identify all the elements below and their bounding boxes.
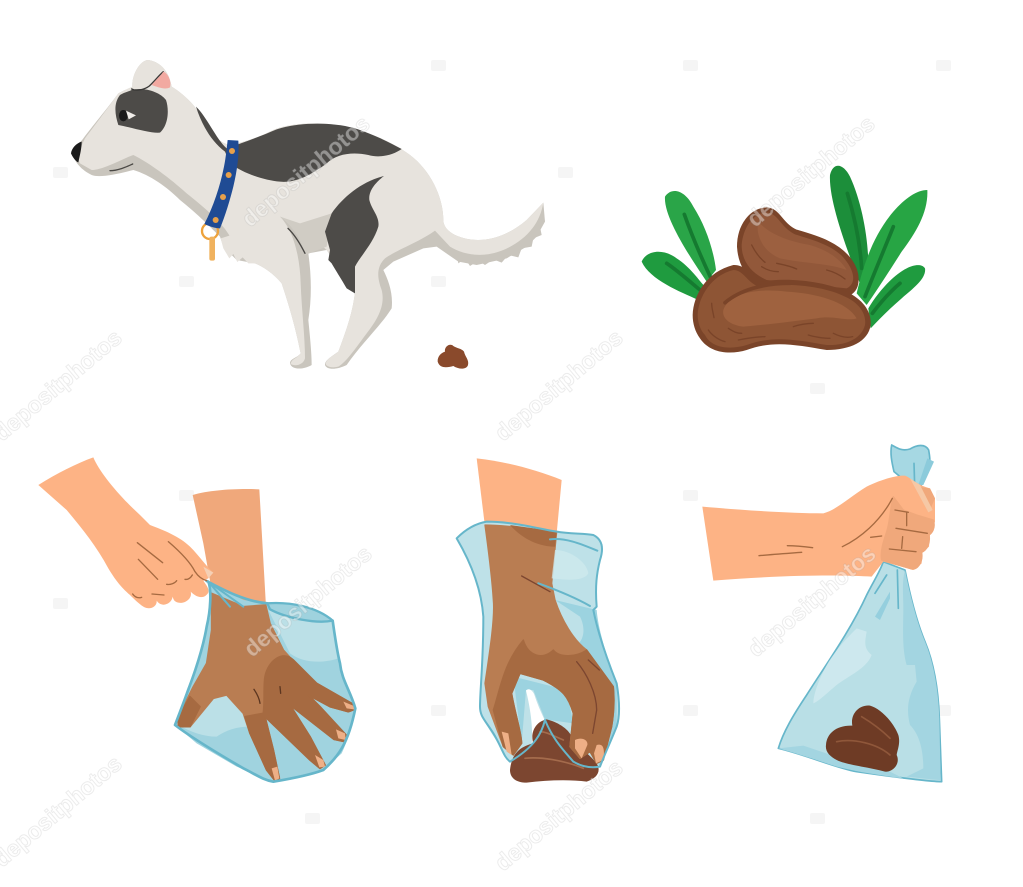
illustration: poop in grass <box>642 166 927 353</box>
back patch <box>196 107 402 182</box>
bag highlight <box>813 628 872 703</box>
watermark: repeated stock-photo text <box>0 110 881 876</box>
outer hand <box>38 457 213 608</box>
nose <box>71 142 82 162</box>
bag knot top <box>891 445 934 488</box>
inner arm <box>193 489 266 610</box>
watermark: repeated stock-photo text: depositphotos <box>490 324 628 446</box>
watermark: repeated stock-photo text: depositphotos <box>743 540 881 662</box>
eye patch <box>115 89 168 133</box>
small dropping <box>438 345 468 369</box>
dog body shadow under belly <box>280 213 332 255</box>
bag top rim <box>267 603 333 622</box>
poop on ground <box>510 719 599 783</box>
poop in bag <box>826 706 899 772</box>
illustration: squatting dog <box>71 60 545 369</box>
watermark: repeated stock-photo text: depositphotos <box>742 110 880 232</box>
hole between fingers <box>526 689 544 745</box>
illustration: two hands opening bag <box>38 457 355 782</box>
flank patch <box>325 176 384 293</box>
illustration: hand holding tied bag <box>702 445 942 782</box>
gloved hand <box>485 525 614 763</box>
bag lighter sheen <box>268 610 338 662</box>
bag outline <box>175 581 355 782</box>
bag body <box>457 522 619 767</box>
bag gathered pleats <box>208 582 243 607</box>
inner ear <box>152 72 170 88</box>
bag sheen <box>552 550 588 580</box>
upper poop coil <box>737 208 858 295</box>
watermark: faint camera icons <box>53 60 951 824</box>
bag body <box>175 582 355 782</box>
bag darker tint <box>513 600 617 767</box>
watermark: repeated stock-photo text: depositphotos <box>490 754 628 876</box>
grass leaves <box>642 166 927 328</box>
tail fur tufts <box>457 220 545 266</box>
dog body shadow layer <box>72 60 545 369</box>
bag body <box>778 562 942 782</box>
gloved hand <box>178 593 355 781</box>
arm and fist <box>702 476 935 581</box>
lower poop coil <box>693 245 871 353</box>
brow line <box>132 72 163 90</box>
collar <box>204 140 239 228</box>
mouth line <box>110 164 133 171</box>
eye <box>119 110 136 121</box>
watermark: repeated stock-photo text: depositphotos <box>239 540 377 662</box>
bag tinted folds <box>778 570 941 780</box>
dog body light fur <box>79 60 543 367</box>
front leg crease <box>288 228 305 253</box>
forearm <box>477 458 562 533</box>
watermark: repeated stock-photo text: depositphotos <box>237 110 375 232</box>
chest fur tufts <box>221 233 257 263</box>
collar ring and tag <box>202 223 218 261</box>
gathered fold strokes <box>875 570 898 608</box>
illustration: hand grabbing poop through bag <box>457 458 619 783</box>
bag outline <box>457 522 619 767</box>
